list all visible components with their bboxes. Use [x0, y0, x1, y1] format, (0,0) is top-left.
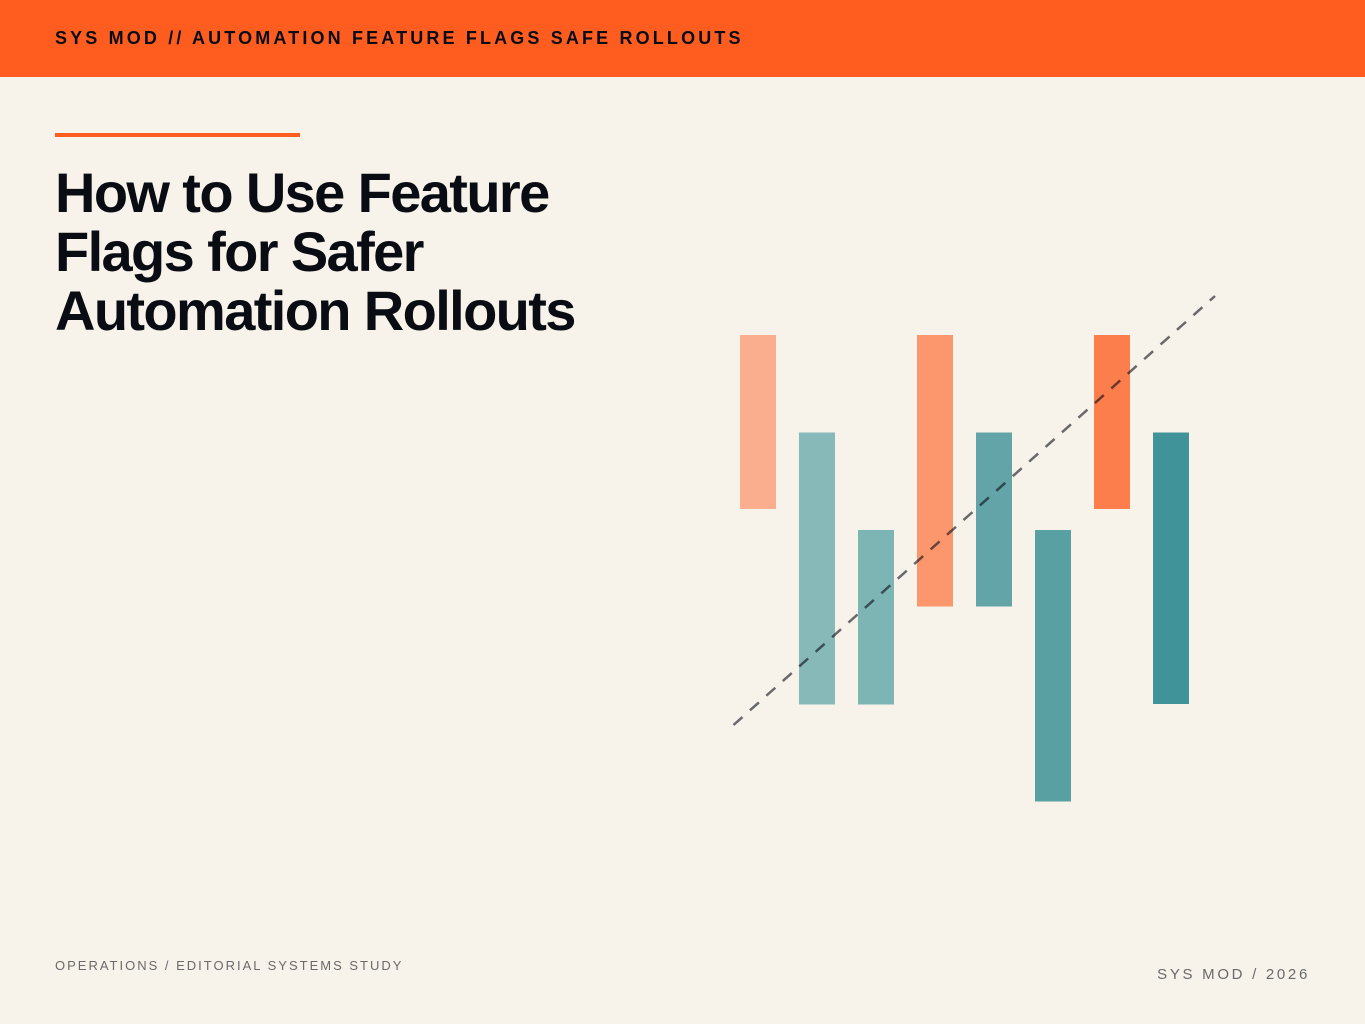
bar 7 [1094, 335, 1130, 509]
header band [0, 0, 1365, 77]
footer right caption: SYS MOD / 2026 [1157, 966, 1310, 983]
bar 8 [1153, 432, 1189, 704]
title [55, 161, 575, 342]
bar 6 [1035, 530, 1071, 802]
title: Flags for Safer [55, 220, 423, 283]
title: How to Use Feature [55, 161, 549, 224]
bar 1 [740, 335, 776, 509]
bar 3 [858, 530, 894, 704]
title: Automation Rollouts [55, 279, 575, 342]
dashed trend line [734, 296, 1215, 725]
bar 4 [917, 335, 953, 606]
footer left caption: OPERATIONS / EDITORIAL SYSTEMS STUDY [55, 958, 403, 973]
bar 5 [976, 432, 1012, 606]
header label: SYS MOD // AUTOMATION FEATURE FLAGS SAFE ROLLOUTS [55, 28, 744, 48]
bar 2 [799, 432, 835, 704]
accent rule [55, 133, 300, 137]
